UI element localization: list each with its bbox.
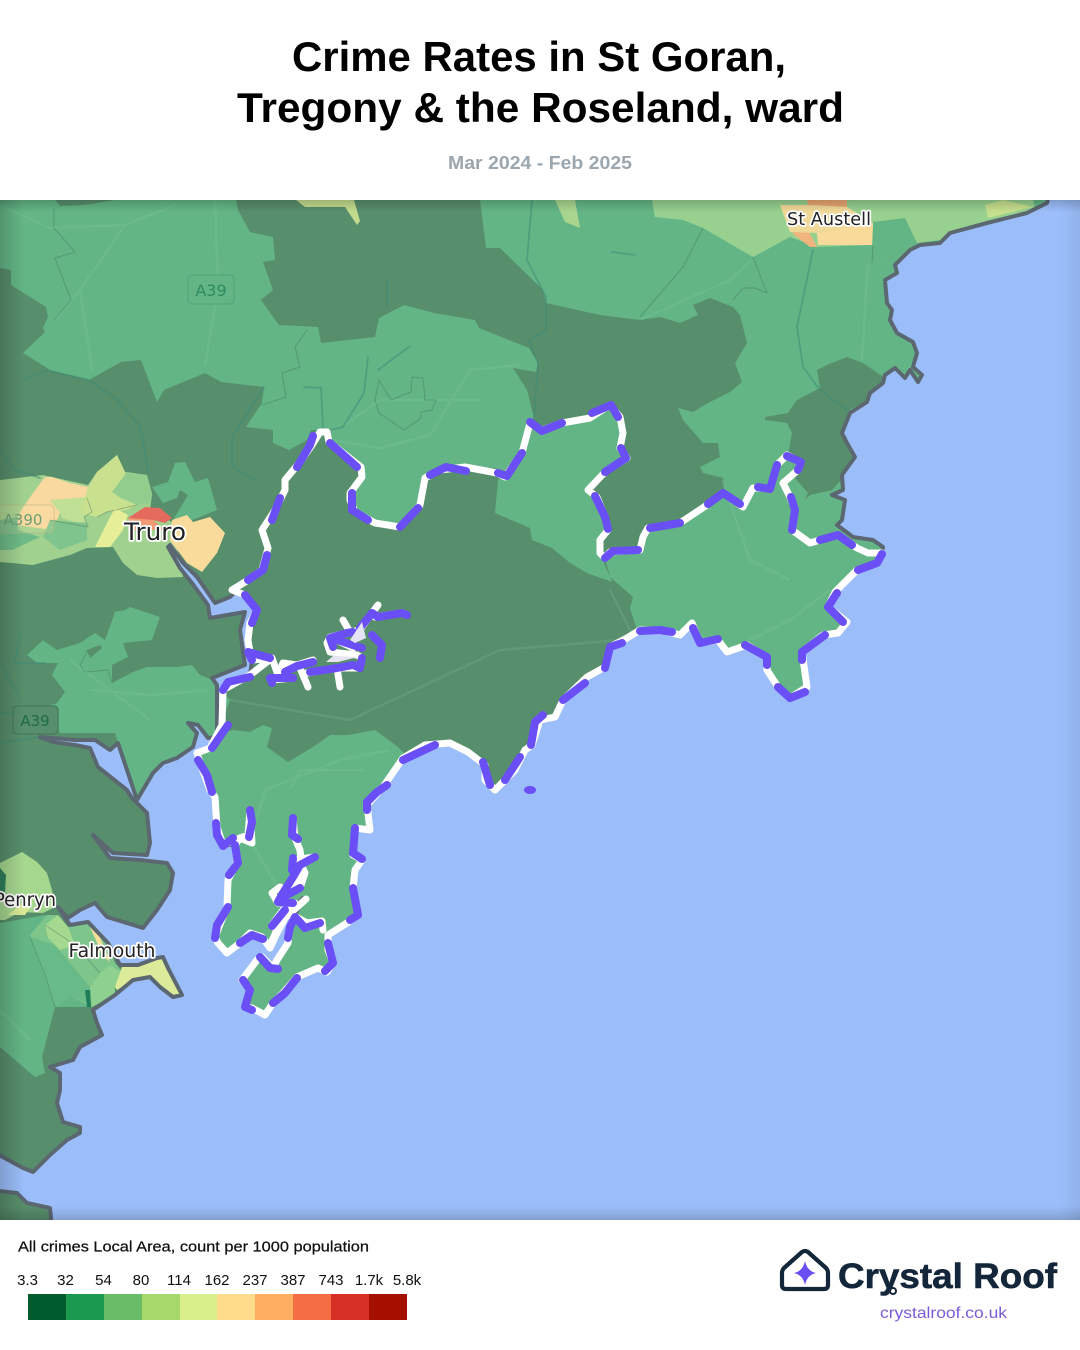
road shield: A39 west: A39 xyxy=(20,712,50,730)
legend colour ramp xyxy=(28,1294,407,1320)
sea with coastline xyxy=(0,190,1080,1230)
ward boundary: white base line xyxy=(197,405,882,1015)
areas: Penryn and Falmouth wards xyxy=(0,852,184,1007)
road shield: A39 north: A39 xyxy=(195,281,227,300)
ward boundary: purple dashes xyxy=(198,405,882,1010)
land base: dark green low-crime areas xyxy=(0,200,747,1220)
legend scale labels: 114 xyxy=(167,1272,191,1289)
wordmark: Crystal Roof xyxy=(838,1257,1057,1296)
roads xyxy=(230,320,724,721)
rivers xyxy=(0,200,847,743)
legend scale labels: 80 xyxy=(133,1272,149,1289)
logo: Crystal Roof xyxy=(782,1251,1057,1322)
legend scale labels: 32 xyxy=(57,1272,74,1289)
legend title: All crimes Local Area, count per 1000 population xyxy=(18,1238,369,1256)
subtitle: date range: Mar 2024 - Feb 2025 xyxy=(448,153,632,173)
road shield: A39 west xyxy=(13,706,58,734)
road shield: A390: A390 xyxy=(4,511,42,529)
title xyxy=(237,33,844,131)
map edge shading xyxy=(0,200,1080,1220)
title: Crime Rates in St Goran, xyxy=(292,33,786,80)
title: Tregony & the Roseland, ward xyxy=(237,84,844,131)
label: St Austell: St Austell xyxy=(787,209,871,230)
legend scale labels: 162 xyxy=(204,1272,230,1289)
icon: house with star xyxy=(782,1251,828,1289)
legend scale labels: 54 xyxy=(95,1272,112,1289)
choropleth map xyxy=(0,190,1080,1230)
label: Falmouth: Falmouth xyxy=(68,940,156,962)
areas: dark pockets by east coast xyxy=(55,200,885,658)
road shield: A39 north xyxy=(188,275,234,304)
legend scale labels: 3.3 xyxy=(17,1272,38,1289)
legend scale labels: 5.8k xyxy=(393,1272,422,1289)
road shield: A390 xyxy=(0,505,54,533)
ward: offshore rock xyxy=(524,786,536,794)
legend scale labels: 387 xyxy=(280,1272,306,1289)
areas: north coastal higher-crime wards near St Austell xyxy=(296,200,1050,263)
areas: Truro wards xyxy=(0,455,225,578)
label: Truro: Truro xyxy=(123,518,186,546)
website url: crystalroof.co.uk xyxy=(880,1305,1008,1322)
ward: tidal flats in the creek xyxy=(326,622,366,662)
legend xyxy=(17,1238,422,1320)
thin ward boundaries xyxy=(30,208,873,1007)
place labels xyxy=(0,209,871,962)
legend scale labels xyxy=(17,1272,422,1289)
areas: lighter green crime band xyxy=(0,200,940,1077)
legend scale labels: 237 xyxy=(242,1272,268,1289)
legend scale labels: 743 xyxy=(318,1272,344,1289)
legend scale labels: 1.7k xyxy=(355,1272,384,1289)
